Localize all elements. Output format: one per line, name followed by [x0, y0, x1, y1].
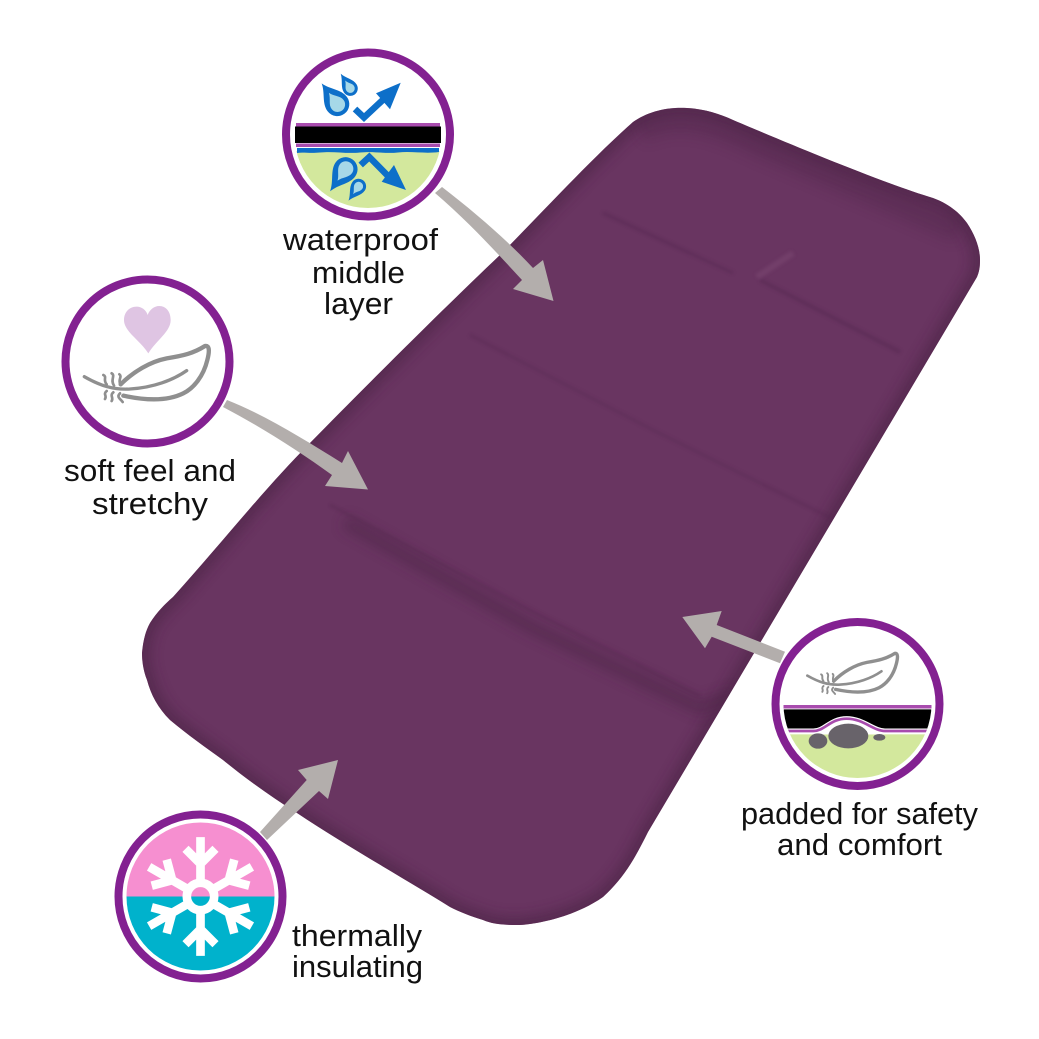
- callout: waterproof middle layer: [282, 52, 450, 321]
- circle badge: [776, 622, 940, 786]
- label: waterproof: [282, 222, 438, 257]
- callout: padded for safety and comfort: [741, 622, 978, 862]
- label: [282, 222, 438, 321]
- circle badge: [66, 280, 230, 444]
- label: layer: [324, 286, 393, 321]
- label: soft feel and: [64, 453, 236, 488]
- label: [741, 796, 978, 862]
- top fabric line: [784, 705, 932, 708]
- label: thermally: [292, 918, 423, 953]
- label: padded for safety: [741, 796, 978, 831]
- label: [292, 918, 423, 984]
- purple padded mat: [142, 108, 980, 925]
- label: stretchy: [92, 486, 209, 521]
- label: insulating: [292, 949, 423, 984]
- callout: soft feel and stretchy: [64, 280, 236, 521]
- circle badge: [118, 814, 282, 978]
- arrow: waterproof to mat: [435, 187, 554, 301]
- arrow: padded to mat: [682, 611, 785, 663]
- icon: feather: [84, 346, 209, 402]
- icon: heart: [124, 306, 171, 353]
- label: and comfort: [777, 827, 942, 862]
- arrow: thermal to mat: [260, 760, 338, 840]
- icon: snowflake: [142, 837, 259, 956]
- label: [64, 453, 236, 521]
- arrow: soft feel to mat: [223, 400, 368, 490]
- two-tone disc: [126, 822, 274, 970]
- icon: feather: [807, 653, 897, 694]
- callout: thermally insulating: [118, 814, 423, 984]
- label: middle: [312, 255, 405, 290]
- circle badge: [286, 52, 450, 216]
- layer diagram: [295, 123, 441, 208]
- layer diagram with pebbles: [784, 709, 932, 778]
- icon: water drops and bounce arrow: [312, 70, 406, 205]
